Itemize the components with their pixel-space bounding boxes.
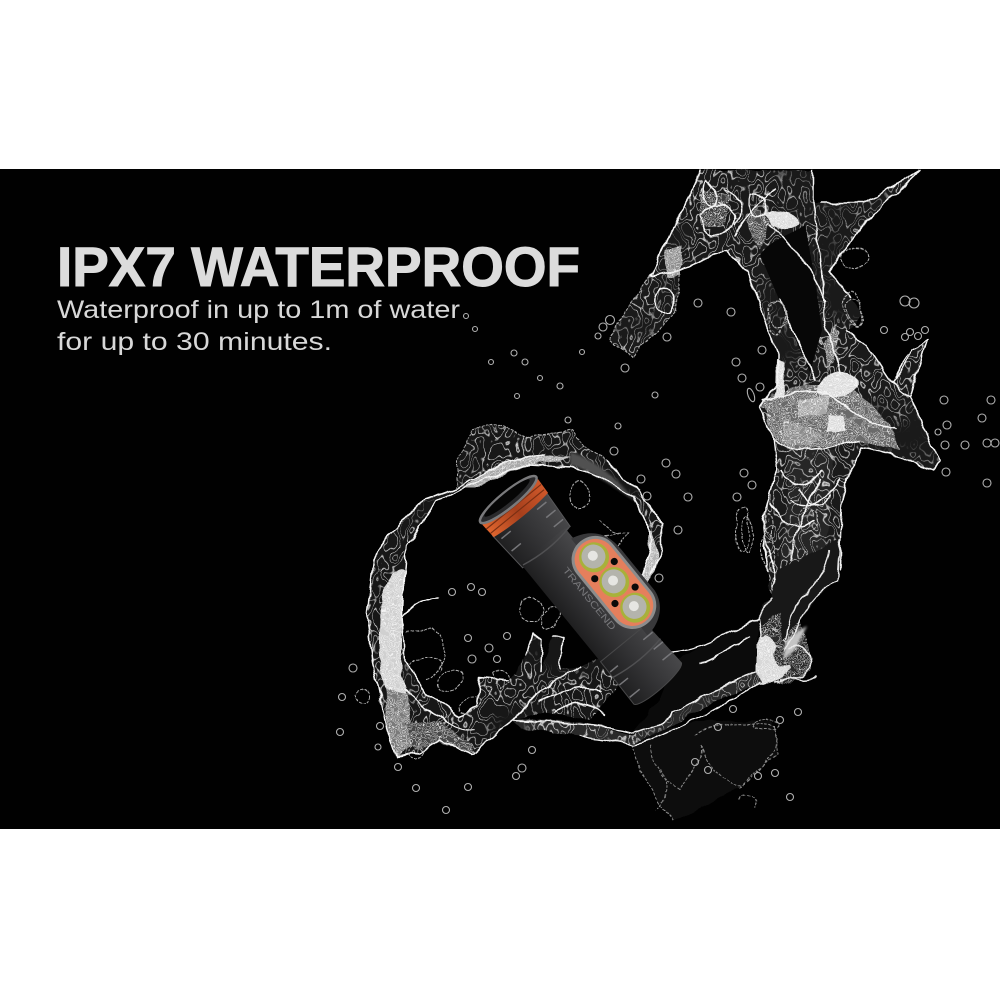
- flashlight main body: [521, 528, 647, 665]
- column faint dotted outlines: [610, 244, 871, 572]
- water splash: lower stream joining ring and column: [510, 617, 762, 745]
- LED head housing: [570, 518, 674, 635]
- title: IPX7 WATERPROOF: [57, 236, 580, 298]
- column dark core: [760, 225, 822, 372]
- ring faint dotted outlines: [356, 425, 628, 759]
- LED lenses: [573, 536, 656, 629]
- flashlight rear collar: [493, 492, 574, 570]
- orange LED plate: [566, 531, 661, 634]
- subtitle text: Waterproof in up to 1m of water: [57, 296, 460, 324]
- black photo panel: [0, 169, 1000, 829]
- LED plate outer rim: [562, 526, 666, 638]
- water droplets: [336, 296, 999, 814]
- brand text on body: TRANSCEND: [560, 565, 618, 633]
- lens cap rim: [475, 471, 541, 529]
- product: flashlight headlamp: [475, 458, 705, 711]
- subtitle text: for up to 30 minutes.: [57, 328, 332, 356]
- plate screws: [589, 556, 640, 609]
- grip ridges: [501, 501, 677, 697]
- bright left arc: [379, 569, 408, 700]
- water splash: ring around the flashlight: [356, 425, 662, 759]
- ring body: [367, 425, 662, 757]
- bright highlights: [665, 190, 857, 447]
- water splash: tall column on the right: [610, 170, 940, 685]
- lens opening: [481, 476, 533, 520]
- subtitle text: [57, 296, 460, 356]
- ring outlines: [367, 455, 662, 757]
- column outlines: [650, 170, 940, 590]
- flashlight front grip: [600, 623, 686, 708]
- lower column section: [757, 540, 840, 650]
- water splash: faint pool lower right: [630, 719, 779, 822]
- top stream highlights: [463, 456, 573, 488]
- column body: [610, 170, 940, 645]
- orange bezel ring: [482, 479, 550, 540]
